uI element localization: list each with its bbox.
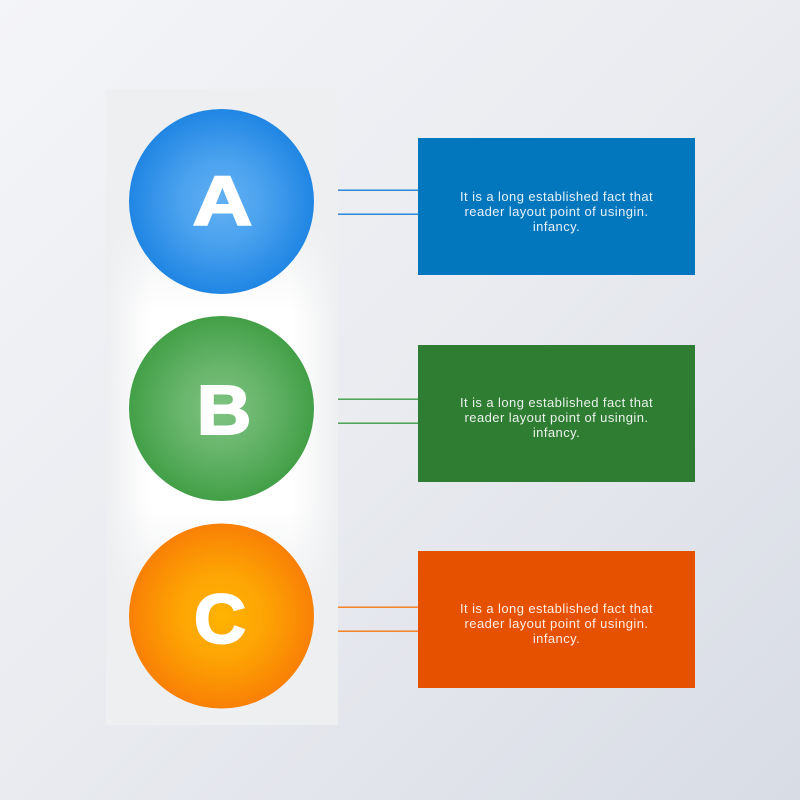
- row C: [129, 524, 695, 708]
- text box C: reader layout point of usingin.: [465, 616, 648, 631]
- text box C: It is a long established fact that: [460, 601, 653, 616]
- connector lines C: [338, 606, 418, 632]
- circle badge A: A: [193, 163, 252, 241]
- text box A: [418, 138, 695, 275]
- circle badge B: [129, 316, 314, 501]
- text box A: reader layout point of usingin.: [465, 204, 648, 219]
- circle badge C: C: [194, 581, 246, 659]
- connector lines B: [338, 398, 418, 424]
- text box C: [418, 551, 695, 688]
- text box A: It is a long established fact that: [460, 189, 653, 204]
- connector lines A: [338, 190, 418, 215]
- text box B: It is a long established fact that: [460, 395, 653, 410]
- circle badge C: [129, 524, 314, 708]
- row B: [129, 316, 695, 501]
- circle badge A: [129, 109, 314, 294]
- text box A: infancy.: [533, 219, 580, 234]
- text box B: [418, 345, 695, 482]
- text box C: infancy.: [533, 631, 580, 646]
- row A: [129, 109, 695, 294]
- panel: circle column: [122, 258, 338, 725]
- circle badge B: B: [197, 372, 251, 449]
- text box B: reader layout point of usingin.: [465, 410, 648, 425]
- text box B: infancy.: [533, 425, 580, 440]
